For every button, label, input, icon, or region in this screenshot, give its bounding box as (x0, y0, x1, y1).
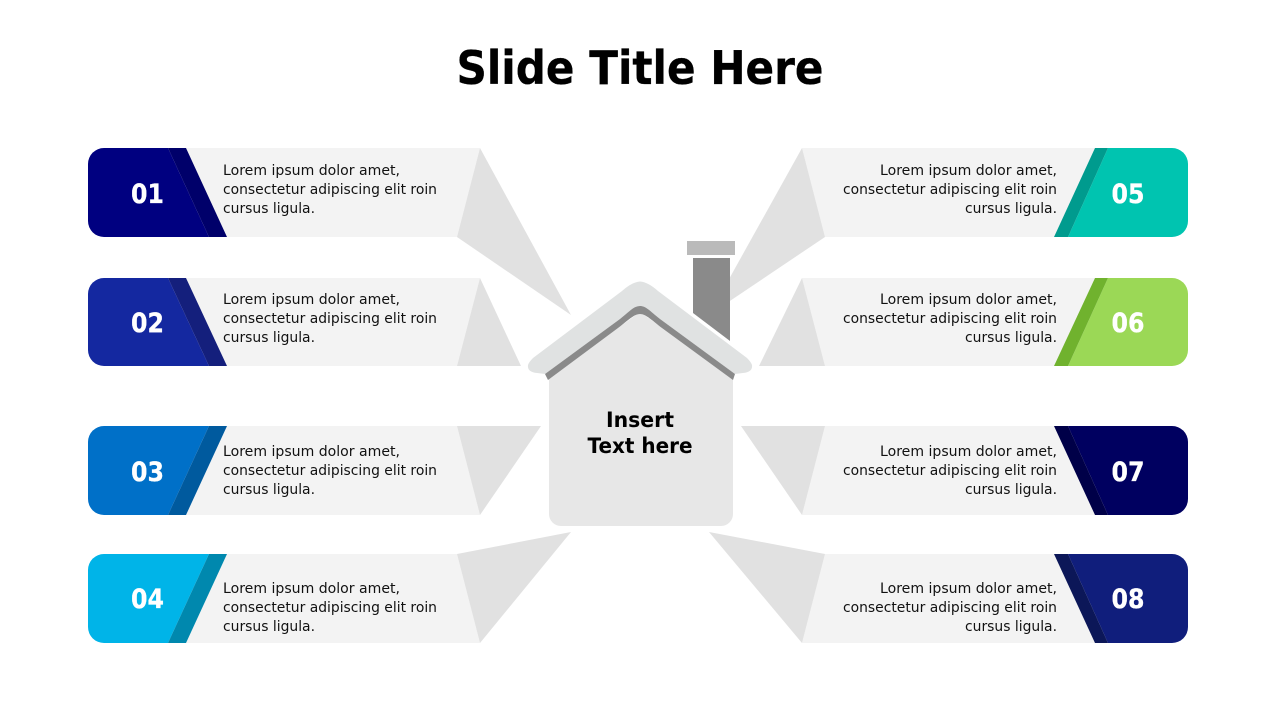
panel: item 03: consectetur adipiscing elit roin (223, 462, 437, 479)
panel: item 05: Lorem ipsum dolor amet, (880, 162, 1057, 179)
panel: item 02: Lorem ipsum dolor amet, (223, 291, 400, 308)
panel: item 04: Lorem ipsum dolor amet, (223, 580, 400, 597)
panel: item 06: consectetur adipiscing elit roin (843, 310, 1057, 327)
center label: Text here (588, 434, 692, 458)
panel: item 01: Lorem ipsum dolor amet, (223, 162, 400, 179)
panel: item 04: consectetur adipiscing elit roin (223, 599, 437, 616)
center label (588, 408, 692, 458)
panel: item 07: 07 (1112, 457, 1144, 488)
panel: item 08: Lorem ipsum dolor amet, (880, 580, 1057, 597)
title: Slide Title Here (456, 41, 824, 95)
panel: item 04: 04 (131, 584, 164, 615)
panel: item 06 (759, 278, 1188, 366)
panel: item 05: cursus ligula. (965, 200, 1057, 217)
panel: item 03: Lorem ipsum dolor amet, (223, 443, 400, 460)
panel: item 07: cursus ligula. (965, 481, 1057, 498)
panel: item 01: cursus ligula. (223, 200, 315, 217)
panel: item 05 (709, 148, 1188, 315)
panel: item 03: 03 (131, 457, 164, 488)
panel: item 08: 08 (1112, 584, 1144, 615)
panel: item 02: cursus ligula. (223, 329, 315, 346)
panel: item 06: Lorem ipsum dolor amet, (880, 291, 1057, 308)
panel: item 02: 02 (131, 308, 164, 339)
panel: item 01: consectetur adipiscing elit roin (223, 181, 437, 198)
house body (549, 312, 733, 526)
panel: item 04 (88, 532, 571, 643)
panel: item 07 (741, 426, 1188, 515)
panel: item 08: consectetur adipiscing elit roin (843, 599, 1057, 616)
chimney (687, 241, 735, 341)
panel: item 03 (88, 426, 541, 515)
icon: house (528, 241, 752, 526)
panel: item 08 (709, 532, 1188, 643)
panel: item 02 (88, 278, 521, 366)
panel: item 07: consectetur adipiscing elit roin (843, 462, 1057, 479)
panel: item 04: cursus ligula. (223, 618, 315, 635)
panel: item 01: 01 (131, 179, 164, 210)
panel: item 07: Lorem ipsum dolor amet, (880, 443, 1057, 460)
panel: item 05: 05 (1112, 179, 1144, 210)
roof (528, 282, 752, 374)
panel: item 01 (88, 148, 571, 315)
panel: item 05: consectetur adipiscing elit roin (843, 181, 1057, 198)
panel: item 06: cursus ligula. (965, 329, 1057, 346)
roof trim (545, 306, 735, 380)
panel: item 08: cursus ligula. (965, 618, 1057, 635)
panel: item 06: 06 (1112, 308, 1144, 339)
panel: item 03: cursus ligula. (223, 481, 315, 498)
center label: Insert (606, 408, 674, 432)
panel: item 02: consectetur adipiscing elit roin (223, 310, 437, 327)
